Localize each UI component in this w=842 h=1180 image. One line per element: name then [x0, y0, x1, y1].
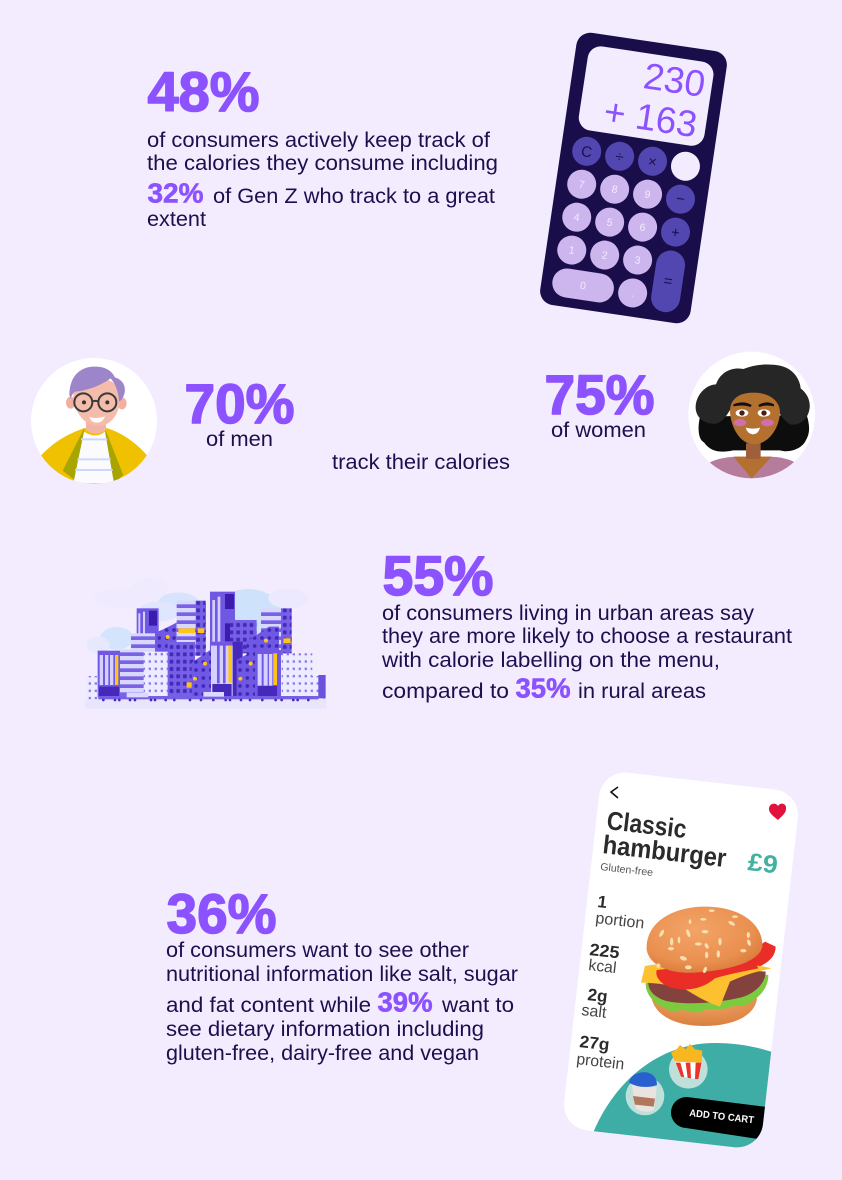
- nutrition list: protein: [576, 1051, 625, 1073]
- teal panel: [594, 1043, 772, 1148]
- text block: urban vs rural: compared to: [382, 679, 509, 703]
- calculator keys: 9: [644, 189, 651, 201]
- section: 55% urban consumers: [381, 544, 792, 704]
- stat: 48%: 48%: [148, 60, 260, 123]
- text block: nutritional and dietary info: of consumers want to see other: [166, 938, 469, 962]
- text: track their calories: track their calories: [332, 450, 510, 474]
- nutrition list: 225: [589, 940, 621, 962]
- text block: urban vs rural: 35%: [516, 672, 571, 704]
- text block: consumers tracking calories: of consumers actively keep track of: [147, 128, 490, 152]
- calculator screen: [577, 45, 715, 148]
- text block: nutritional and dietary info: and fat content while: [166, 993, 371, 1017]
- stat: 75% of women: of women: [551, 418, 646, 442]
- nutrition list: 1: [597, 892, 608, 912]
- sky and clouds: [87, 578, 308, 653]
- text block: urban vs rural: with calorie labelling on the menu,: [381, 648, 720, 672]
- calculator screen: 230: [641, 55, 708, 105]
- stat: 36%: 36%: [166, 882, 276, 945]
- calculator keys: 6: [639, 221, 646, 234]
- back buildings: [131, 592, 292, 657]
- calculator keys: .: [630, 288, 635, 300]
- illustration: coffee cup: [626, 1072, 664, 1115]
- phone mockup: burger app: [561, 770, 801, 1165]
- calculator keys: 3: [634, 254, 641, 267]
- calculator keys: =: [662, 272, 674, 291]
- text block: urban vs rural: in rural areas: [578, 679, 706, 703]
- price: £9: [746, 848, 779, 879]
- stat: 70% of men: 70%: [184, 372, 294, 435]
- calculator keys: 7: [578, 179, 586, 191]
- calculator keys: ÷: [614, 148, 625, 166]
- calculator keys: 4: [573, 211, 581, 224]
- front buildings: [85, 642, 326, 699]
- calculator keys: 8: [611, 184, 618, 196]
- text block: consumers tracking calories: [147, 128, 498, 231]
- text block: consumers tracking calories: the calories they consume including: [147, 151, 498, 175]
- product title: Gluten-free: [600, 861, 654, 879]
- product title: [600, 805, 728, 879]
- nutrition list: 2g: [587, 985, 609, 1006]
- illustration: city skyline: [85, 578, 327, 709]
- section: 48% calorie tracking: [147, 60, 498, 231]
- text block: nutritional and dietary info: want to: [441, 993, 514, 1017]
- icon: woman avatar: [688, 352, 815, 482]
- nutrition list: [576, 892, 645, 1073]
- calculator keys: C: [580, 143, 593, 162]
- nutrition list: salt: [581, 1002, 608, 1022]
- back arrow: [611, 787, 618, 798]
- stat: 70% of men: of men: [206, 427, 273, 451]
- icon: man avatar: [31, 358, 157, 490]
- calculator keys: −: [675, 190, 686, 208]
- calculator keys: 2: [601, 249, 609, 262]
- stat: 75% of women: 75%: [544, 363, 654, 426]
- calculator keys: 0: [579, 280, 587, 292]
- text block: consumers tracking calories: extent: [147, 207, 206, 231]
- text block: nutritional and dietary info: [166, 938, 518, 1065]
- heart icon: [769, 804, 786, 820]
- product title: Classic: [605, 805, 688, 844]
- calculator keys: ×: [647, 153, 658, 171]
- text block: urban vs rural: they are more likely to choose a restaurant: [382, 624, 792, 648]
- nutrition list: portion: [595, 910, 645, 933]
- calculator screen: + 163: [601, 91, 700, 145]
- street and cars: [85, 692, 327, 709]
- calculator keys: [550, 135, 702, 314]
- illustration: hamburger: [640, 905, 776, 1032]
- text block: urban vs rural: of consumers living in urban areas say: [382, 601, 754, 625]
- text block: urban vs rural: [381, 601, 792, 704]
- product title: hamburger: [601, 829, 728, 873]
- text block: consumers tracking calories: 32%: [148, 178, 204, 208]
- text block: nutritional and dietary info: nutritional information like salt, sugar: [166, 962, 518, 986]
- add to cart button: ADD TO CART: [689, 1108, 754, 1126]
- section: 36% nutritional information: [166, 882, 518, 1065]
- illustration: fries: [669, 1044, 708, 1089]
- calculator keys: 5: [606, 216, 614, 229]
- text block: nutritional and dietary info: gluten-free, dairy-free and vegan: [166, 1041, 479, 1065]
- text block: nutritional and dietary info: 39%: [378, 986, 433, 1018]
- calculator keys: +: [670, 224, 681, 242]
- text block: consumers tracking calories: of Gen Z who track to a great: [213, 184, 495, 208]
- nutrition list: kcal: [588, 957, 617, 977]
- sesame seeds: [656, 909, 752, 974]
- icon: calculator: [538, 31, 729, 325]
- calculator keys: 1: [568, 244, 576, 257]
- nutrition list: 27g: [579, 1032, 611, 1054]
- stat: 55%: 55%: [382, 544, 494, 607]
- add to cart button: [671, 1097, 765, 1139]
- text block: nutritional and dietary info: see dietary information including: [166, 1017, 484, 1041]
